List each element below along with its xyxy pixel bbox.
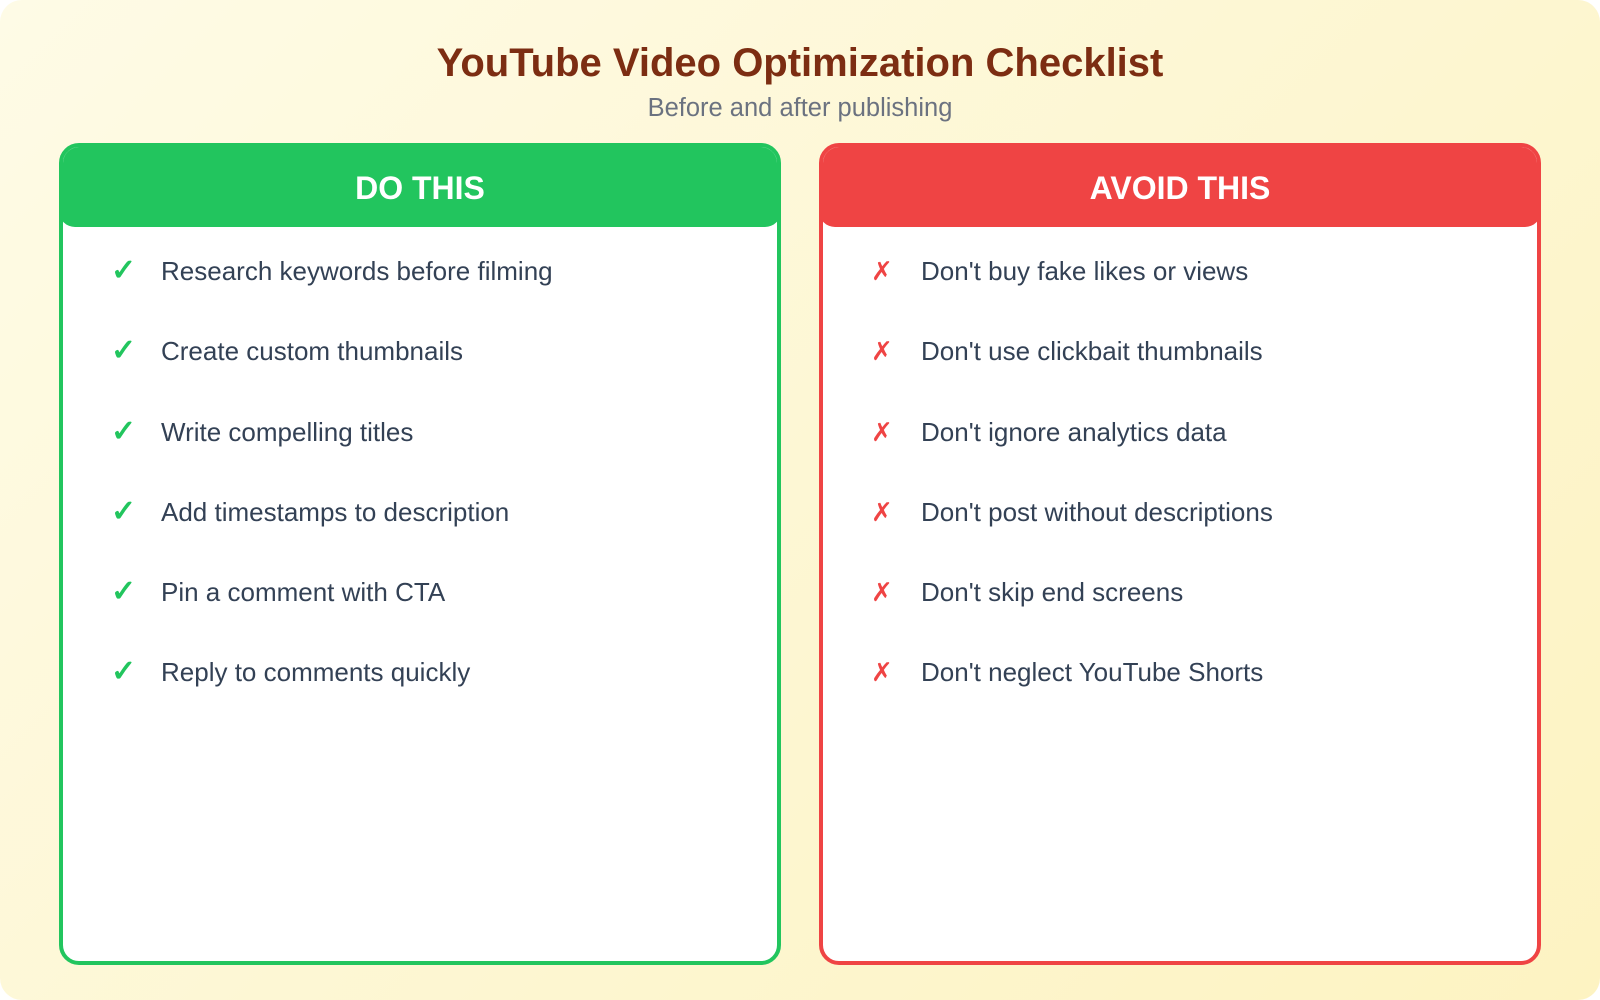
item: shorts: ✗ <box>871 657 893 687</box>
item: pin comment: Pin a comment with CTA <box>161 577 445 607</box>
header: avoid this: AVOID THIS <box>1090 170 1270 206</box>
item: reply: ✓ <box>111 655 136 688</box>
item: research keywords: ✓ <box>111 254 136 287</box>
item: clickbait: Don't use clickbait thumbnails <box>921 336 1263 366</box>
header: do this: DO THIS <box>355 170 485 206</box>
item: clickbait: ✗ <box>871 336 893 366</box>
item: timestamps: ✓ <box>111 495 136 528</box>
item: end screens: Don't skip end screens <box>921 577 1183 607</box>
panel: do this <box>59 143 781 965</box>
header: avoid this <box>819 143 1541 227</box>
panel: avoid this <box>819 143 1541 965</box>
item: thumbnails: ✓ <box>111 334 136 367</box>
item: pin comment: ✓ <box>111 575 136 608</box>
item: titles: ✓ <box>111 415 136 448</box>
item: descriptions: Don't post without descriptions <box>921 497 1273 527</box>
item: analytics: ✗ <box>871 417 893 447</box>
item: descriptions: ✗ <box>871 497 893 527</box>
item: reply: Reply to comments quickly <box>161 657 470 687</box>
item: titles: Write compelling titles <box>161 417 413 447</box>
header: do this <box>59 143 781 227</box>
title: YouTube Video Optimization Checklist <box>437 41 1163 85</box>
item: shorts: Don't neglect YouTube Shorts <box>921 657 1263 687</box>
item: analytics: Don't ignore analytics data <box>921 417 1227 447</box>
item: fake likes: Don't buy fake likes or views <box>921 256 1248 286</box>
subtitle: Before and after publishing <box>648 94 952 122</box>
item: thumbnails: Create custom thumbnails <box>161 336 463 366</box>
item: end screens: ✗ <box>871 577 893 607</box>
item: research keywords: Research keywords before filming <box>161 256 553 286</box>
item: timestamps: Add timestamps to description <box>161 497 509 527</box>
item: fake likes: ✗ <box>871 256 893 286</box>
